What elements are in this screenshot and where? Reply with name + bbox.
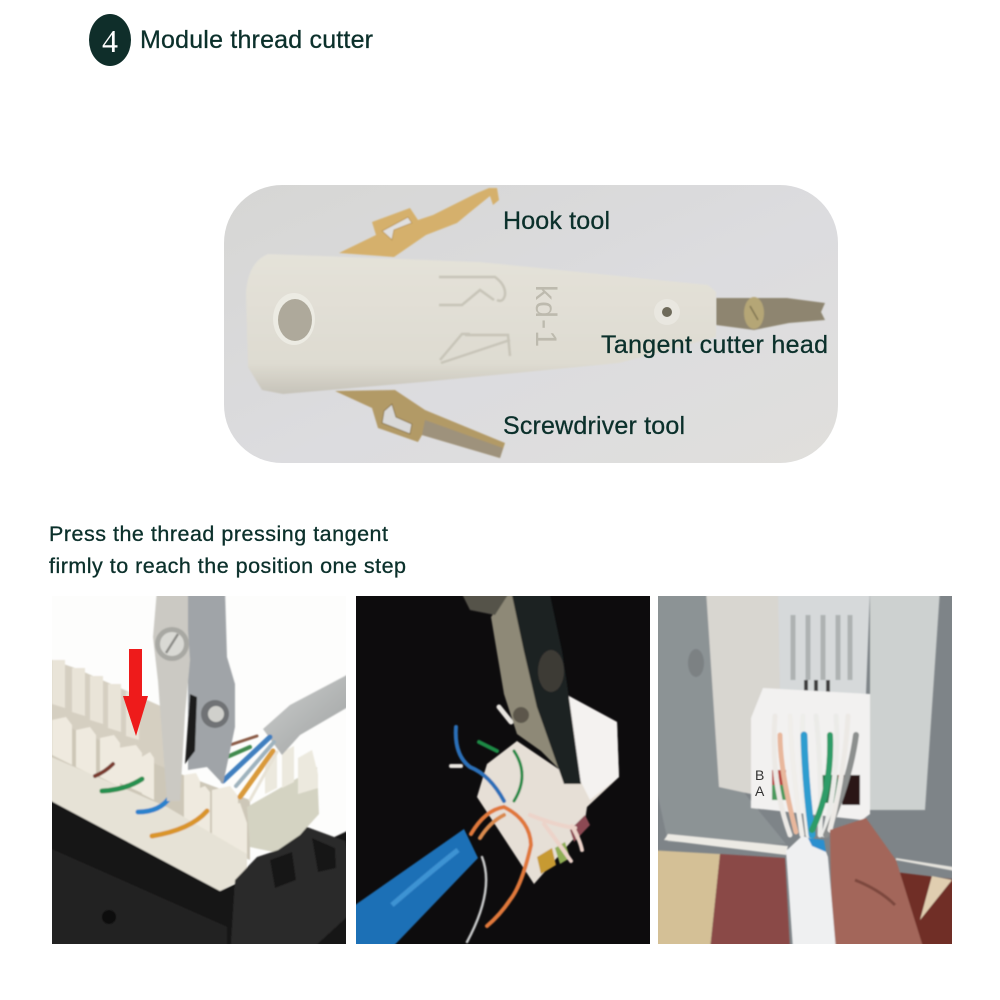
- grey cable: [262, 674, 346, 756]
- photo: punching patch panel: [52, 596, 346, 944]
- instruction text: firmly to reach the position one step: [49, 554, 406, 578]
- label: screwdriver tool: Screwdriver tool: [503, 412, 685, 440]
- step number badge: [89, 14, 131, 66]
- wires: [774, 716, 856, 835]
- translucent cap: [778, 590, 870, 694]
- label: tangent cutter head: Tangent cutter head: [601, 331, 828, 359]
- label: hook tool: Hook tool: [503, 207, 610, 235]
- front comb teeth: [73, 730, 251, 860]
- title: Module thread cutter: [140, 26, 373, 54]
- wires: [95, 736, 277, 836]
- icon: screwdriver tool blade: [335, 390, 505, 458]
- white cable: [786, 836, 836, 950]
- right comb: [247, 767, 319, 854]
- panel: tool photo: [224, 185, 838, 463]
- tool arms: [188, 590, 235, 784]
- black base: [52, 800, 346, 944]
- black clips: [231, 826, 346, 944]
- red arrow: [123, 649, 148, 736]
- white keystone jack: [477, 696, 619, 884]
- cream front strip: [40, 752, 247, 891]
- step number badge: 4: [102, 23, 118, 59]
- icon: hook tool blade: [339, 188, 499, 257]
- photo: finished wall socket: [650, 590, 960, 950]
- icon: cutter head: [716, 297, 825, 330]
- instruction text: [49, 522, 406, 578]
- wires: [451, 707, 582, 942]
- instruction text: Press the thread pressing tangent: [49, 522, 388, 546]
- back comb of panel: [52, 660, 165, 768]
- hand: [830, 818, 924, 950]
- icon: white punch-down handle: kd-1: [529, 285, 562, 347]
- icon: white punch-down handle: [246, 254, 716, 394]
- photo: keystone jack on black: [345, 590, 650, 955]
- tool arms: [491, 590, 560, 770]
- keystone body: [751, 688, 870, 820]
- wood floor and red-brown: [658, 850, 721, 944]
- label: B A: [755, 770, 764, 796]
- label: B A: B: [755, 767, 764, 783]
- label: B A: A: [755, 783, 765, 799]
- blue cable: [356, 828, 479, 944]
